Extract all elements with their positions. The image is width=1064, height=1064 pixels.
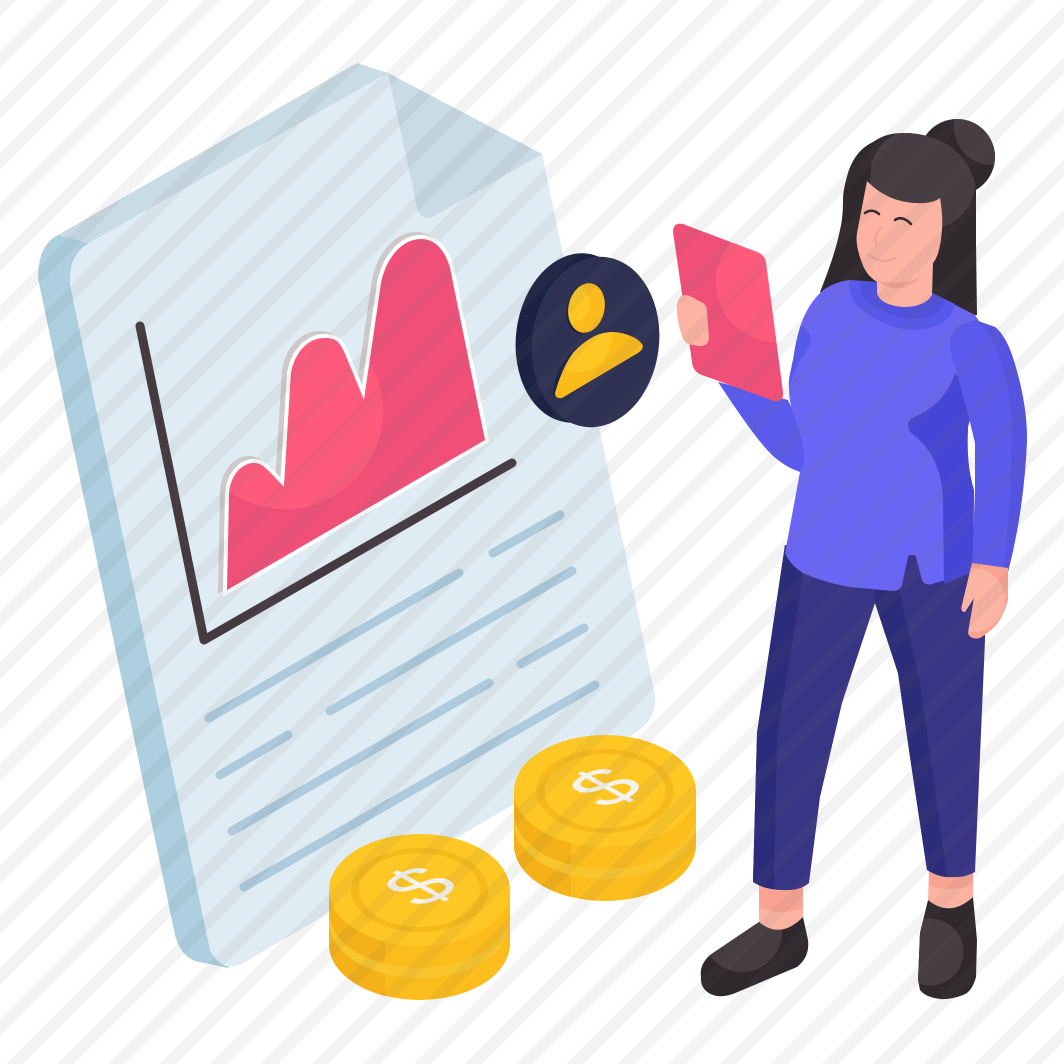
woman [673,89,1030,999]
badge back [506,246,648,430]
document front page [70,73,655,966]
trousers [753,545,985,890]
right sleeve [950,320,1027,572]
chart axes [140,326,512,640]
left shoe [700,917,808,996]
face and neck [857,181,942,307]
dollar sign: $ [548,756,663,818]
left arm [718,382,805,472]
badge front [522,249,669,435]
document top edge [58,63,388,243]
chart white outline [227,239,485,590]
document side edge [38,235,240,968]
document [38,63,655,968]
area chart [140,236,512,640]
eyes [865,211,911,224]
ankles [759,868,973,930]
tablet [673,224,784,402]
right shoe [918,897,977,1000]
person badge [516,253,660,428]
coin stack: right [514,735,696,901]
chart area [227,239,485,590]
folded corner [388,73,542,218]
neck shadow [877,278,920,288]
sweater [785,280,985,591]
left hand [677,295,709,346]
collar [849,280,955,330]
chart highlight [229,338,383,509]
shoes [701,892,977,999]
chart shadow [222,236,480,587]
mouth [869,255,895,261]
nose [875,227,882,246]
person icon [553,283,643,398]
text lines [209,515,595,887]
dollar sign: $ [363,855,478,917]
hair [820,119,995,316]
right hand [961,563,1008,638]
coin stack: left [329,834,510,1000]
